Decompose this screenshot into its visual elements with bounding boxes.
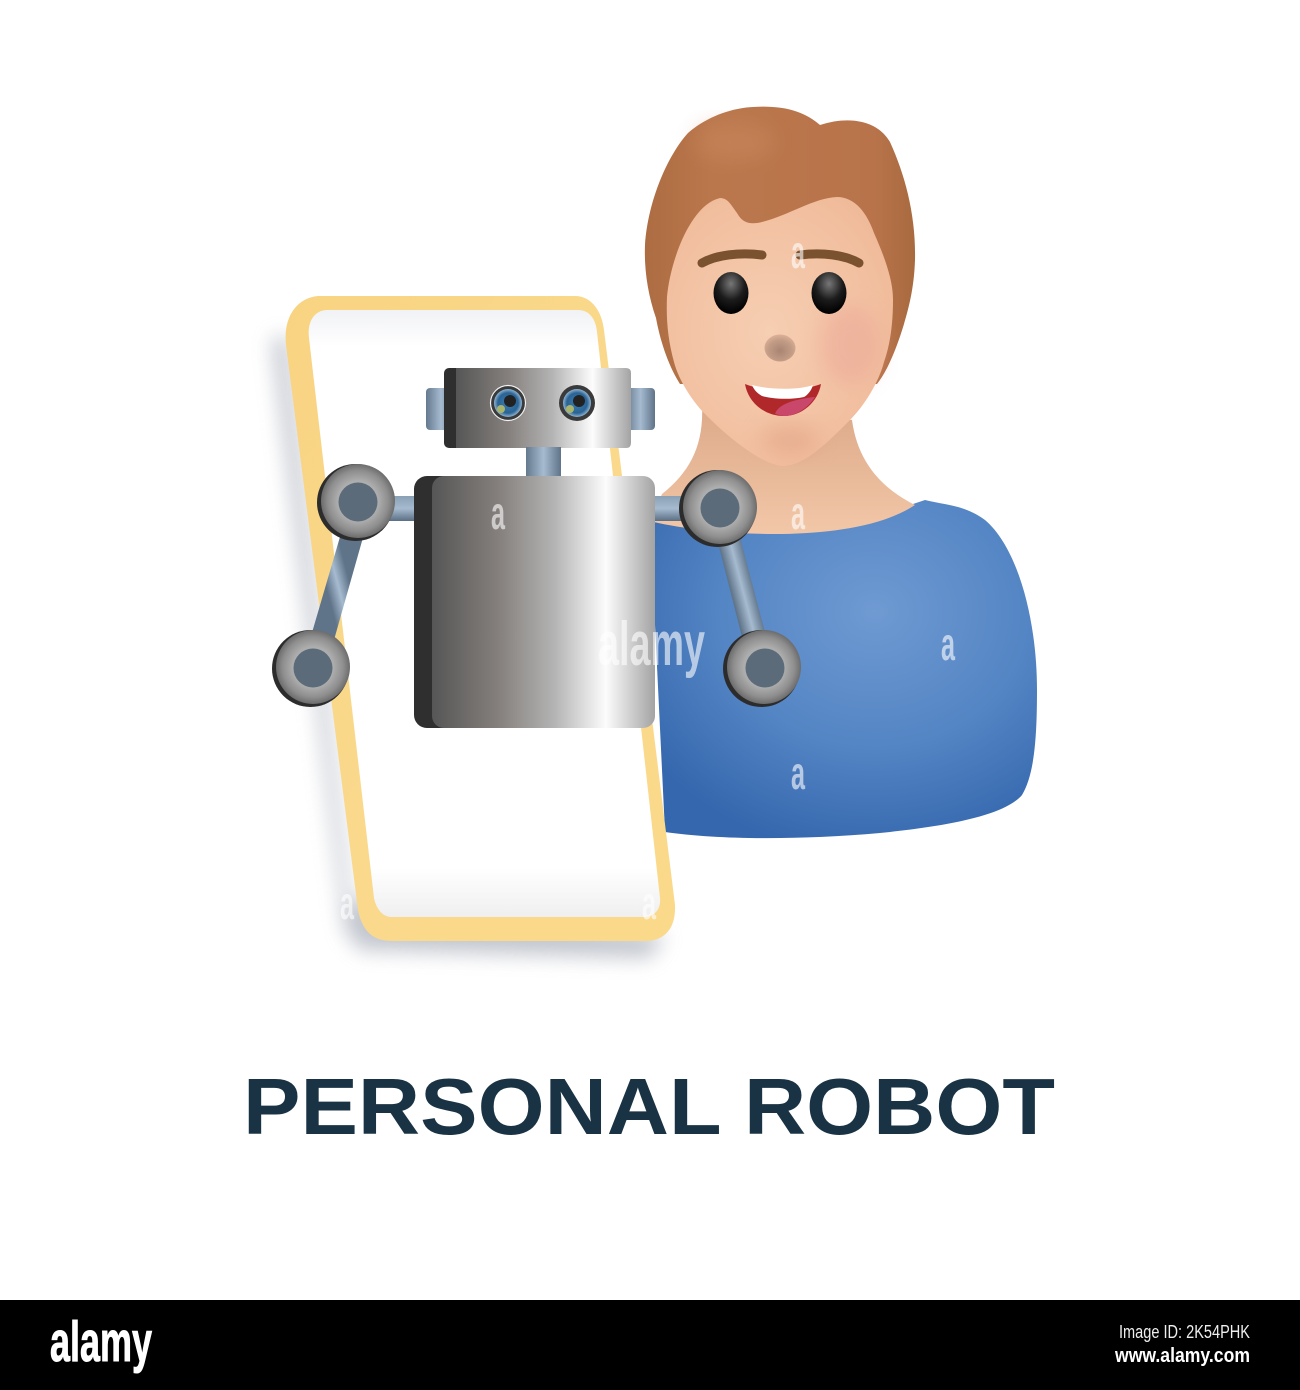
watermarks: a — [791, 226, 805, 278]
neck — [650, 405, 915, 534]
phone shadow — [272, 335, 665, 958]
watermarks: alamy — [598, 610, 705, 679]
eyebrow right — [800, 254, 859, 263]
right ear — [626, 388, 655, 430]
phone — [272, 296, 675, 958]
shirt — [650, 500, 1037, 838]
watermarks: a — [340, 877, 354, 929]
mouth — [745, 384, 821, 416]
hair highlight — [695, 122, 775, 162]
watermarks — [340, 226, 955, 929]
robot eye left — [490, 385, 526, 421]
chin shade — [760, 424, 820, 456]
robot head — [444, 368, 631, 448]
cheek blush — [820, 305, 880, 385]
robot eye right — [559, 385, 595, 421]
joint top right — [679, 470, 757, 547]
eye left — [714, 272, 748, 314]
watermarks: a — [791, 487, 805, 539]
joint top left — [317, 464, 395, 541]
footer bar — [0, 1300, 1300, 1390]
nose — [764, 334, 796, 362]
title: PERSONAL ROBOT — [243, 1062, 1055, 1151]
watermarks: a — [491, 487, 505, 539]
phone frame — [286, 296, 675, 941]
joint bottom left — [272, 630, 350, 707]
robot body — [414, 476, 655, 728]
upper left arm — [388, 496, 424, 521]
left ear — [426, 388, 456, 430]
face — [667, 197, 893, 466]
phone screen — [309, 310, 660, 917]
person — [645, 107, 1037, 838]
eye right — [812, 272, 846, 314]
watermarks: a — [791, 747, 805, 799]
eyebrow left — [702, 254, 762, 263]
robot neck — [526, 447, 561, 477]
footer logo: alamy — [50, 1310, 152, 1374]
lower right arm — [716, 530, 767, 645]
robot — [272, 368, 801, 728]
joint bottom right — [723, 630, 801, 707]
image id: Image ID: 2K54PHK — [1119, 1322, 1250, 1342]
upper right arm — [654, 496, 690, 521]
lower left arm — [311, 530, 364, 640]
website: www.alamy.com — [1114, 1345, 1250, 1367]
hair — [645, 107, 915, 384]
watermarks: a — [642, 877, 656, 929]
watermarks: a — [941, 618, 955, 670]
